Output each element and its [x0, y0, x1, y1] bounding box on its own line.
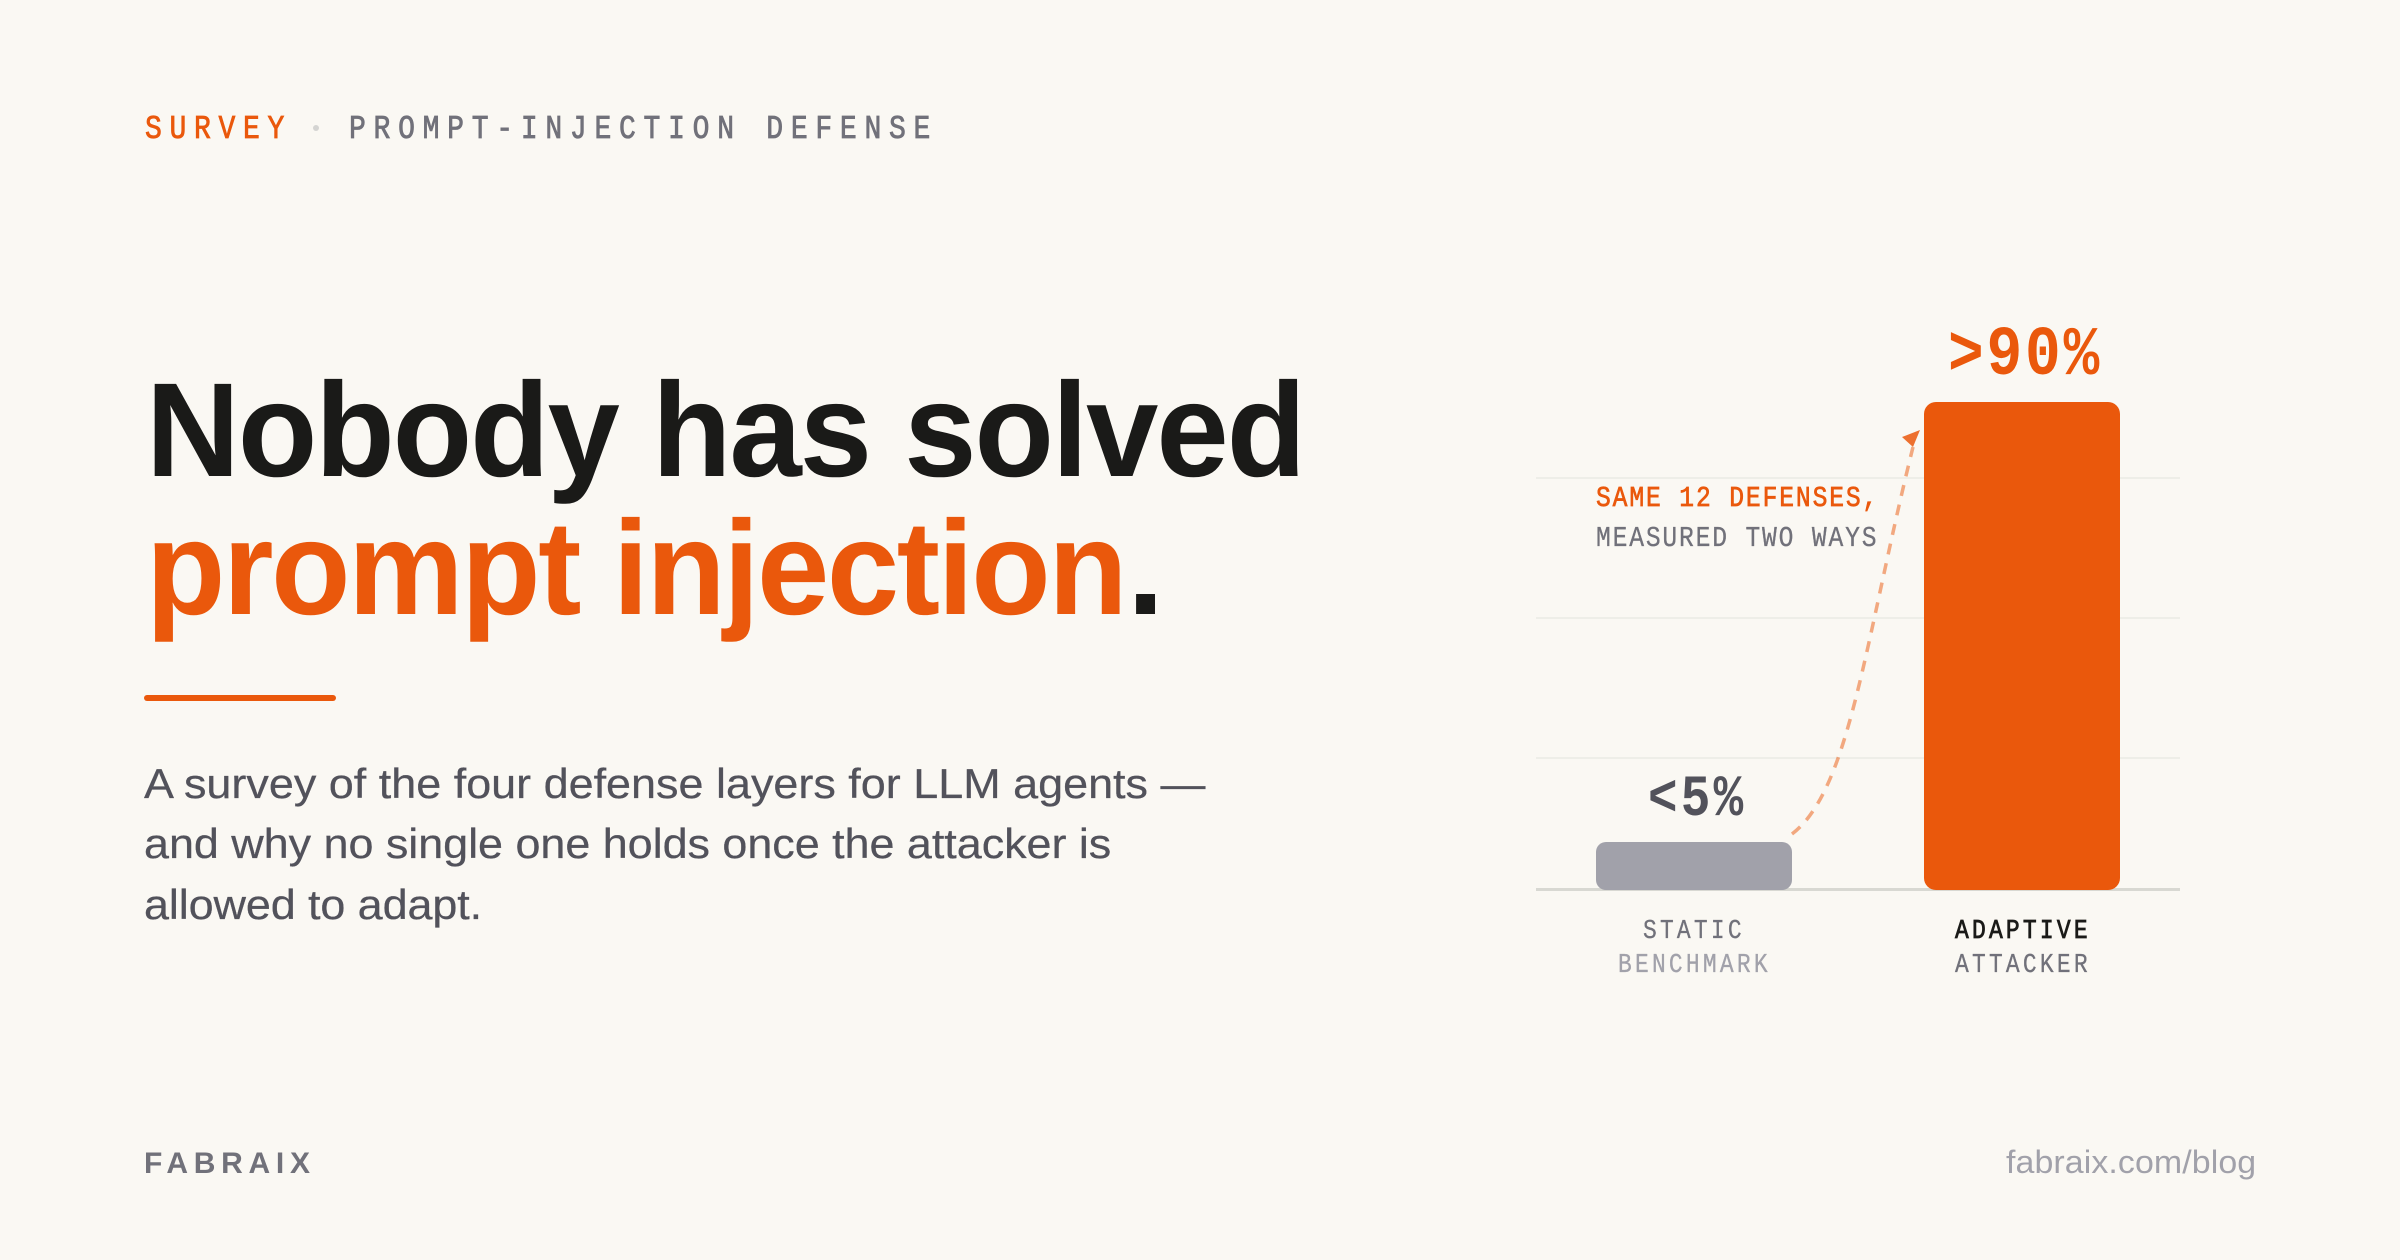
- eyebrow separator dot: [313, 125, 319, 131]
- title: [146, 355, 1306, 643]
- annotation: SAME 12 DEFENSES,: [1596, 483, 1877, 516]
- grid lines: [1536, 478, 2180, 758]
- bar: adaptive attacker: [1924, 402, 2120, 890]
- axis label: adaptive attacker: ATTACKER: [1955, 949, 2088, 981]
- bar chart: [1536, 316, 2180, 981]
- bar: static benchmark: [1596, 842, 1792, 890]
- footer brand: FABRAIX: [144, 1147, 310, 1180]
- subtitle: allowed to adapt.: [144, 882, 482, 929]
- subtitle: and why no single one holds once the attacker is: [144, 821, 1111, 868]
- annotation: [1596, 483, 1877, 556]
- value: adaptive: >90%: [1948, 316, 2100, 396]
- eyebrow header: [145, 112, 930, 149]
- eyebrow: topic: PROMPT-INJECTION DEFENSE: [349, 112, 930, 149]
- axis label: static benchmark: BENCHMARK: [1618, 949, 1768, 981]
- axis label: adaptive attacker: ADAPTIVE: [1955, 915, 2088, 947]
- annotation: MEASURED TWO WAYS: [1596, 523, 1877, 556]
- baseline: [1536, 888, 2180, 891]
- eyebrow: survey: SURVEY: [145, 112, 284, 149]
- arrow: static to adaptive: [1792, 430, 1920, 834]
- accent rule: [144, 695, 336, 701]
- axis label: adaptive attacker: [1955, 915, 2088, 981]
- title line 2 highlight: prompt injection: [146, 493, 1128, 642]
- footer url: fabraix.com/blog: [2006, 1144, 2256, 1180]
- axis label: static benchmark: STATIC: [1643, 915, 1742, 947]
- title period: .: [1127, 494, 1164, 643]
- value: static: <5%: [1648, 768, 1744, 833]
- title line 1: Nobody has solved: [146, 355, 1306, 504]
- axis label: static benchmark: [1618, 915, 1768, 981]
- subtitle: [144, 761, 1206, 929]
- subtitle: A survey of the four defense layers for LLM agents —: [144, 761, 1206, 808]
